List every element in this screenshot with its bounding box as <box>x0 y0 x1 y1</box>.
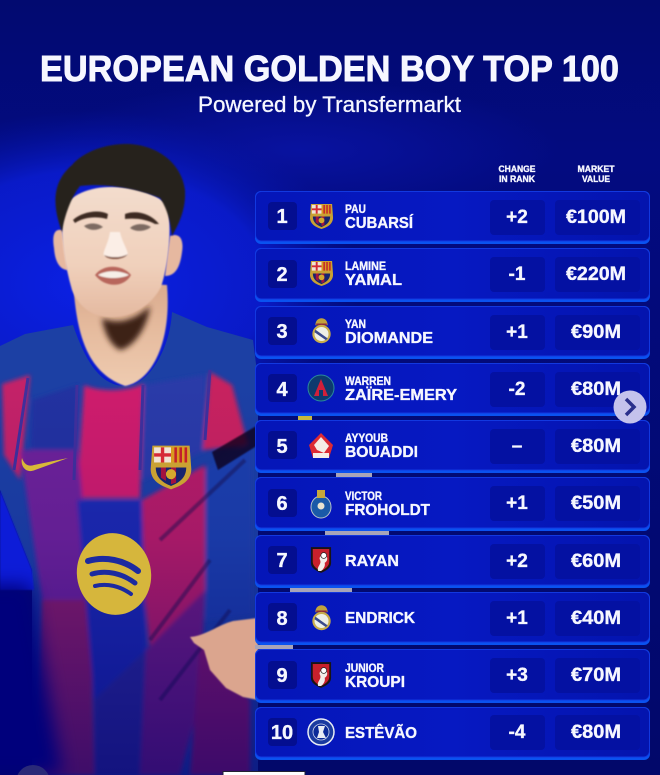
row 1 <box>255 191 650 244</box>
row 2: YAMAL <box>345 272 402 289</box>
player mouth <box>95 267 131 285</box>
nike swoosh <box>22 458 68 471</box>
crest: lille <box>309 433 333 458</box>
bottom white box fragment <box>223 772 305 775</box>
row 4 <box>255 363 650 416</box>
column header: change in rank: IN RANK <box>499 174 535 184</box>
row 4: 4 <box>276 379 288 401</box>
row 4: ZAÏRE-EMERY <box>345 386 457 404</box>
row 10: €80M <box>571 722 621 743</box>
player photo <box>0 144 258 775</box>
neck shadow <box>102 306 150 350</box>
player hand <box>190 618 258 700</box>
row 6: +1 <box>506 493 528 514</box>
row 3: DIOMANDE <box>345 330 433 347</box>
row 5: – <box>512 436 522 457</box>
row 8: 8 <box>276 608 288 630</box>
column header: change in rank: CHANGE <box>498 164 536 174</box>
row 9: 9 <box>276 665 288 687</box>
shirt stripes <box>2 372 252 775</box>
row 3: 3 <box>276 321 288 343</box>
player face <box>62 187 170 317</box>
crest: psg <box>308 375 334 401</box>
row 3: YAN <box>345 319 366 331</box>
player ears <box>53 230 182 276</box>
row 2 <box>255 248 650 302</box>
row 4: WARREN <box>345 376 391 388</box>
row 9: KROUPI <box>345 674 405 691</box>
row 10 <box>255 707 650 760</box>
row 6 <box>255 477 650 531</box>
row 7 <box>255 535 650 588</box>
row 6: VICTOR <box>345 491 383 503</box>
column header: market value: MARKET <box>578 164 615 174</box>
row 2: €220M <box>566 264 626 285</box>
row 1: €100M <box>566 207 626 228</box>
row 8: ENDRICK <box>345 610 415 627</box>
row 2: -1 <box>509 264 526 285</box>
row 9: +3 <box>506 665 528 686</box>
row 10: 10 <box>271 722 293 744</box>
row 1: +2 <box>506 207 528 228</box>
row 1: 1 <box>276 206 288 228</box>
column header: market value: VALUE <box>582 174 610 184</box>
crest: chelsea <box>308 719 334 745</box>
row 1: PAU <box>345 204 366 216</box>
row 8 <box>255 592 650 645</box>
column header: change in rank <box>498 164 536 184</box>
subtitle: Powered by Transfermarkt <box>198 92 461 117</box>
row 5: €80M <box>571 436 621 457</box>
column header: market value <box>578 164 615 184</box>
row 9: JUNIOR <box>345 663 385 675</box>
row 3: +1 <box>506 322 528 343</box>
row 6: FROHOLDT <box>345 502 430 519</box>
row 3 <box>255 306 650 359</box>
spotify logo <box>69 526 159 622</box>
player eyes <box>84 223 151 231</box>
row 2: 2 <box>276 264 288 286</box>
player neck <box>73 280 168 386</box>
row 3: €90M <box>571 322 621 343</box>
between-row artefacts <box>255 416 389 649</box>
row 4: -2 <box>509 379 525 400</box>
player eyebrows <box>73 212 159 224</box>
row 9 <box>255 649 650 703</box>
row 2: LAMINE <box>345 261 386 273</box>
row 5: BOUADDI <box>345 444 418 461</box>
crest: porto <box>311 490 331 518</box>
row 10: -4 <box>509 722 526 743</box>
row 5: AYYOUB <box>345 433 388 445</box>
row 6: €50M <box>571 493 621 514</box>
row 5 <box>255 420 650 473</box>
row 7: €60M <box>571 551 621 572</box>
row 6: 6 <box>276 493 288 515</box>
row 7: RAYAN <box>345 553 399 570</box>
row 1: CUBARSÍ <box>345 213 414 232</box>
bottom-left circle fragment <box>16 765 50 775</box>
row 7: 7 <box>276 550 288 572</box>
barca shirt crest <box>150 446 192 490</box>
row 7: +2 <box>506 551 528 572</box>
row 10: ESTÊVÃO <box>345 722 417 742</box>
player hair <box>55 144 185 236</box>
player nose <box>104 232 128 259</box>
player shirt <box>0 312 258 775</box>
dark lower left of torso <box>0 585 62 775</box>
row 4: €80M <box>571 379 621 400</box>
row 9: €70M <box>571 665 621 686</box>
row 8: +1 <box>506 608 528 629</box>
bright background at left of torso <box>0 490 34 590</box>
carousel next button <box>614 390 646 424</box>
row 8: €40M <box>571 608 621 629</box>
row 5: 5 <box>276 436 288 458</box>
title: EUROPEAN GOLDEN BOY TOP 100 <box>40 48 619 89</box>
